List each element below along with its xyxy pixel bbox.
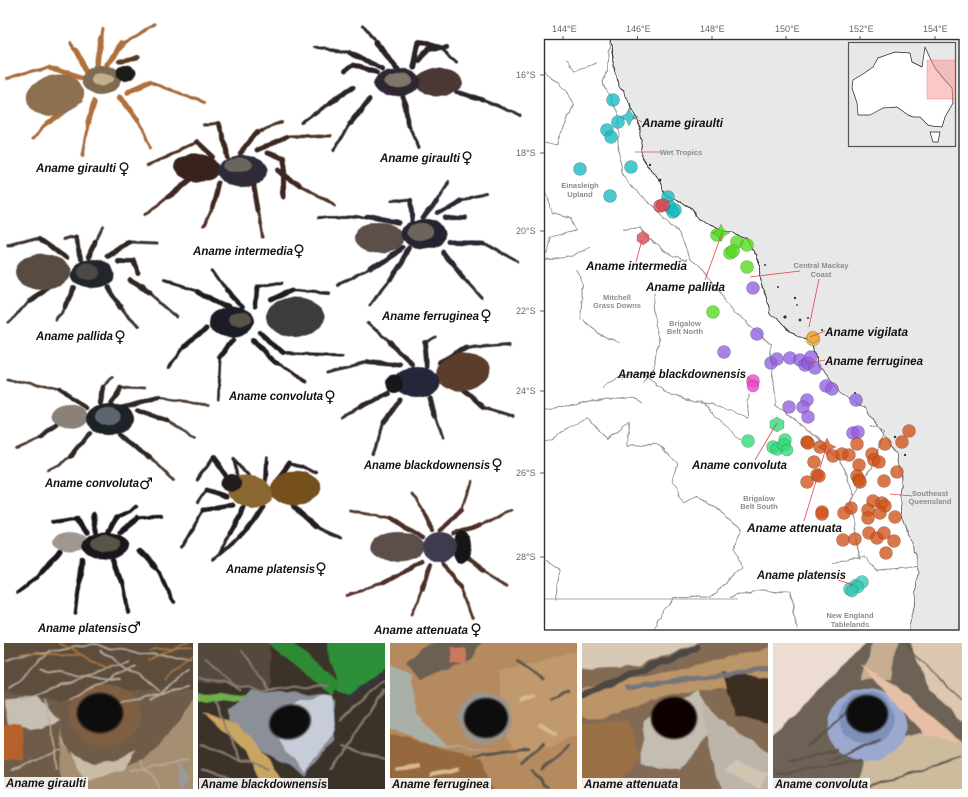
panel: spider photographs: [7, 25, 520, 618]
caption: Aname giraulti female right: [379, 148, 473, 167]
bioregion labels: New England: [826, 611, 874, 620]
spider: Aname convoluta female: [163, 270, 343, 400]
caption: Aname platensis male: Aname platensis: [37, 621, 127, 635]
caption: Aname blackdownensis female: ♀: [491, 455, 503, 474]
caption: Aname attenuata female: Aname attenuata: [373, 623, 468, 637]
caption: Aname blackdownensis: Aname blackdownensis: [200, 777, 327, 791]
points: Aname giraulti: [574, 94, 682, 218]
latitude axis: 18°S: [516, 148, 536, 158]
distribution points: [574, 94, 916, 597]
points: Aname vigilata: [806, 331, 820, 346]
longitude axis: 148°E: [700, 24, 725, 34]
caption: Aname attenuata female: [373, 620, 482, 639]
bioregion labels: Wet Tropics: [660, 148, 702, 157]
species labels on map: Aname convoluta: [691, 458, 787, 472]
spider: Aname ferruginea female: [318, 182, 518, 305]
spider: Aname pallida female: [8, 228, 178, 328]
latitude axis: [516, 70, 544, 562]
map base: land, ocean, coast and boundaries: [545, 40, 958, 630]
latitude axis: 16°S: [516, 70, 536, 80]
panel: distribution map: [516, 20, 968, 650]
panel: burrow photographs: [0, 630, 968, 797]
caption: Aname attenuata: Aname attenuata: [583, 777, 678, 791]
spider: Aname blackdownensis female: [328, 323, 513, 455]
caption: Aname convoluta female: Aname convoluta: [228, 389, 323, 403]
caption: Aname convoluta male: Aname convoluta: [44, 476, 139, 490]
species labels on map: Aname vigilata: [824, 325, 908, 339]
caption: Aname platensis female: ♀: [315, 559, 327, 578]
spider: Aname intermedia female: [145, 121, 335, 237]
points: Aname platensis: [844, 576, 868, 597]
southern coastline: [820, 367, 918, 650]
points: Aname intermedia: [637, 198, 670, 245]
species labels on map: Aname ferruginea: [824, 354, 923, 368]
spider: Aname giraulti female, dark: [303, 27, 520, 150]
caption: Aname giraulti female left: ♀: [118, 159, 130, 178]
spider: Aname convoluta male: [8, 377, 208, 479]
coastline: [608, 20, 820, 367]
caption: Aname platensis male: ♂: [127, 618, 141, 637]
caption: Aname blackdownensis female: Aname blackdownensis: [363, 458, 490, 472]
photo: Aname convoluta burrow: [763, 633, 968, 797]
bioregion labels: Einasleigh: [561, 181, 599, 190]
species labels on map: Aname intermedia: [585, 259, 687, 273]
caption: Aname convoluta female: [228, 387, 336, 406]
inset: Australia locator: [848, 42, 956, 146]
caption: Aname convoluta male: [44, 474, 153, 493]
bioregion labels: Queensland: [909, 497, 952, 506]
caption: Aname giraulti female left: Aname giraulti: [35, 161, 117, 175]
study area highlight: [927, 60, 955, 99]
species labels on map: Aname attenuata: [746, 521, 842, 535]
latitude axis: 22°S: [516, 306, 536, 316]
leader lines: [632, 117, 912, 585]
bioregion labels: Brigalow: [669, 319, 701, 328]
points: Aname attenuata: [800, 424, 916, 560]
caption: Aname giraulti female left: [35, 159, 130, 178]
caption: Aname platensis female: Aname platensis: [225, 562, 315, 576]
longitude axis: 154°E: [923, 24, 948, 34]
caption: Aname ferruginea female: ♀: [480, 306, 492, 325]
caption: Aname pallida female: ♀: [114, 327, 126, 346]
caption: Aname pallida female: [35, 327, 126, 346]
species labels on map: Aname platensis: [756, 568, 846, 582]
caption: Aname intermedia female: Aname intermedia: [192, 244, 293, 258]
Australia outline: [852, 47, 953, 127]
caption: Aname intermedia female: [192, 241, 305, 260]
bioregion labels: Central Mackay: [793, 261, 849, 270]
caption: Aname platensis male: [37, 618, 141, 637]
bioregion boundaries: [545, 40, 918, 630]
latitude axis: 26°S: [516, 468, 536, 478]
ocean: [608, 20, 968, 650]
caption: Aname ferruginea: Aname ferruginea: [391, 777, 489, 791]
caption: Aname pallida female: Aname pallida: [35, 329, 113, 343]
latitude axis: 28°S: [516, 552, 536, 562]
spider: Aname platensis male: [18, 507, 173, 613]
longitude axis: 150°E: [775, 24, 800, 34]
spider captions: [35, 148, 503, 639]
caption: Aname platensis female: [225, 559, 327, 578]
longitude axis: 146°E: [626, 24, 651, 34]
points: Aname pallida: [706, 224, 754, 318]
bioregion labels: Upland: [567, 190, 593, 199]
spider: Aname giraulti female, amber: [7, 25, 205, 155]
photo: Aname attenuata burrow: [572, 633, 778, 797]
photo: Aname ferruginea burrow: [380, 630, 587, 797]
bioregion labels: Belt North: [667, 327, 704, 336]
caption: Aname giraulti female right: ♀: [461, 148, 473, 167]
Tasmania: [930, 132, 940, 142]
bioregion labels: Grass Downs: [593, 301, 641, 310]
bioregion labels: Southeast: [912, 489, 949, 498]
caption: Aname convoluta: Aname convoluta: [774, 777, 868, 791]
species labels on map: Aname blackdownensis: [617, 367, 746, 381]
bioregion labels: Coast: [811, 270, 832, 279]
caption: Aname ferruginea female: [381, 306, 492, 325]
map frame: [544, 40, 959, 630]
caption: Aname convoluta male: ♂: [139, 474, 153, 493]
caption: Aname convoluta female: ♀: [324, 387, 336, 406]
points: Aname ferruginea: [718, 282, 864, 440]
species labels on map: Aname giraulti: [641, 116, 724, 130]
photo: Aname blackdownensis burrow: [188, 633, 395, 797]
caption: Aname giraulti female right: Aname giraulti: [379, 151, 461, 165]
photo: Aname giraulti burrow: [0, 633, 203, 797]
latitude axis: 20°S: [516, 226, 536, 236]
islands: [649, 164, 906, 456]
points: Aname blackdownensis: [746, 374, 760, 392]
species labels on map: Aname pallida: [645, 280, 725, 294]
caption: Aname ferruginea female: Aname ferruginea: [381, 309, 479, 323]
bioregion labels: Mitchell: [603, 293, 631, 302]
longitude axis: 152°E: [849, 24, 874, 34]
bioregion labels: Brigalow: [743, 494, 775, 503]
state border: [545, 598, 738, 600]
caption: Aname intermedia female: ♀: [293, 241, 305, 260]
bioregion labels: Tablelands: [831, 620, 869, 629]
bioregion labels: Belt South: [740, 502, 778, 511]
points: Aname convoluta: [742, 417, 793, 456]
spider: Aname attenuata female: [347, 482, 512, 618]
bioregion labels: [561, 148, 952, 629]
longitude axis: [552, 24, 948, 39]
caption: Aname giraulti: Aname giraulti: [5, 776, 87, 790]
spider: Aname platensis female: [182, 458, 340, 560]
caption: Aname attenuata female: ♀: [470, 620, 482, 639]
species labels on map: [585, 116, 923, 582]
longitude axis: 144°E: [552, 24, 577, 34]
latitude axis: 24°S: [516, 386, 536, 396]
